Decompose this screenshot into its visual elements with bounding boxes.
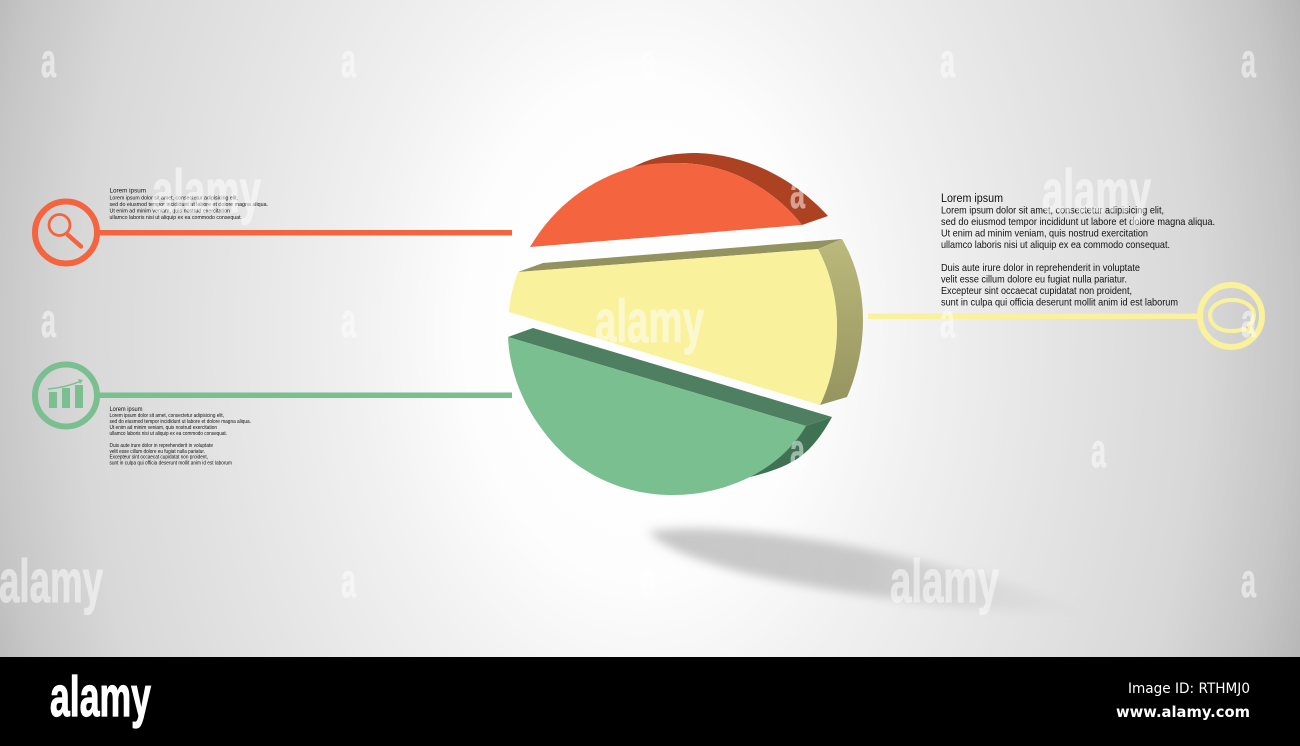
text block: red: Ut enim ad minim veniam, quis nostrud exercitation bbox=[110, 208, 230, 214]
watermarks: small: a bbox=[341, 555, 356, 608]
text block: green: Lorem ipsum bbox=[110, 406, 142, 413]
text block: red bbox=[110, 188, 268, 221]
icon: magnifier bbox=[49, 214, 81, 246]
watermarks: small: a bbox=[790, 425, 805, 478]
text block: yellow: Duis aute irure dolor in reprehenderit in voluptate bbox=[941, 263, 1140, 274]
3D sliced circle bbox=[508, 153, 863, 495]
text block: yellow: sed do eiusmod tempor incididunt ut labore et dolore magna aliqua. bbox=[941, 217, 1215, 228]
watermarks: small: a bbox=[790, 166, 805, 219]
callout: green bbox=[35, 364, 512, 426]
watermarks: small: a bbox=[41, 35, 56, 88]
text block: yellow: Ut enim ad minim veniam, quis nostrud exercitation bbox=[941, 228, 1148, 240]
watermarks: small bbox=[41, 35, 1256, 608]
text block: green bbox=[110, 406, 251, 466]
text block: green: Excepteur sint occaecat cupidatat non proident, bbox=[110, 454, 208, 460]
text block: green: Lorem ipsum dolor sit amet, consectetur adipisicing elit, bbox=[110, 413, 224, 419]
text block: green: Duis aute irure dolor in reprehenderit in voluptate bbox=[110, 443, 213, 449]
watermarks: large bbox=[0, 158, 1151, 615]
yellow slice bbox=[509, 239, 863, 405]
text block: yellow: sunt in culpa qui officia deserunt mollit anim id est laborum bbox=[941, 298, 1178, 308]
text block: green: sed do eiusmod tempor incididunt ut labore et dolore magna aliqua. bbox=[110, 419, 251, 425]
text block: green: Ut enim ad minim veniam, quis nostrud exercitation bbox=[110, 425, 217, 431]
watermarks: small: a bbox=[940, 35, 955, 88]
floor shadow bbox=[648, 529, 1085, 612]
text block: yellow: ullamco laboris nisi ut aliquip ex ea commodo consequat. bbox=[941, 240, 1170, 251]
watermarks: small: a bbox=[341, 295, 356, 348]
callout: red bbox=[35, 202, 512, 264]
footer bar bbox=[0, 657, 1300, 746]
watermarks: small: a bbox=[1241, 555, 1256, 608]
text block: yellow: Lorem ipsum bbox=[941, 193, 1003, 205]
text block: yellow bbox=[941, 193, 1215, 308]
image id: Image ID: RTHMJ0 bbox=[1128, 681, 1250, 697]
watermarks: small: a bbox=[341, 35, 356, 88]
watermarks: small: a bbox=[1091, 425, 1106, 478]
footer logo: alamy bbox=[50, 665, 151, 729]
text block: green: velit esse cillum dolore eu fugiat nulla pariatur. bbox=[110, 449, 205, 455]
watermarks: large: alamy bbox=[1042, 158, 1151, 225]
watermarks: small: a bbox=[641, 555, 656, 608]
text block: red: Lorem ipsum bbox=[110, 188, 146, 194]
text block: yellow: Lorem ipsum dolor sit amet, consectetur adipisicing elit, bbox=[941, 206, 1164, 216]
text block: green: sunt in culpa qui officia deserunt mollit anim id est laborum bbox=[110, 460, 232, 466]
icon: speech bubble bbox=[1210, 300, 1254, 332]
text block: yellow: Excepteur sint occaecat cupidatat non proident, bbox=[941, 286, 1132, 297]
watermarks: small: a bbox=[41, 295, 56, 348]
icon: bar chart bbox=[48, 379, 83, 408]
green slice bbox=[508, 328, 832, 495]
text block: red: ullamco laboris nisi ut aliquip ex ea commodo consequat. bbox=[110, 215, 242, 221]
watermarks: large: alamy bbox=[152, 158, 261, 225]
watermarks: small: a bbox=[641, 35, 656, 88]
red slice bbox=[530, 153, 828, 247]
text block: yellow: velit esse cillum dolore eu fugiat nulla pariatur. bbox=[941, 274, 1127, 286]
callout: yellow bbox=[868, 285, 1262, 347]
text block: red: sed do eiusmod tempor incididunt ut labore et dolore magna aliqua. bbox=[110, 202, 268, 208]
text block: red: Lorem ipsum dolor sit amet, consectetur adipisicing elit, bbox=[110, 196, 238, 202]
watermarks: large: alamy bbox=[890, 548, 999, 615]
website: www.alamy.com bbox=[1116, 703, 1250, 721]
text block: green: ullamco laboris nisi ut aliquip ex ea commodo consequat. bbox=[110, 431, 227, 437]
watermarks: large: alamy bbox=[595, 288, 704, 355]
watermarks: large: alamy bbox=[0, 548, 103, 615]
watermarks: small: a bbox=[940, 295, 955, 348]
watermarks: small: a bbox=[1241, 295, 1256, 348]
watermarks: small: a bbox=[1241, 35, 1256, 88]
